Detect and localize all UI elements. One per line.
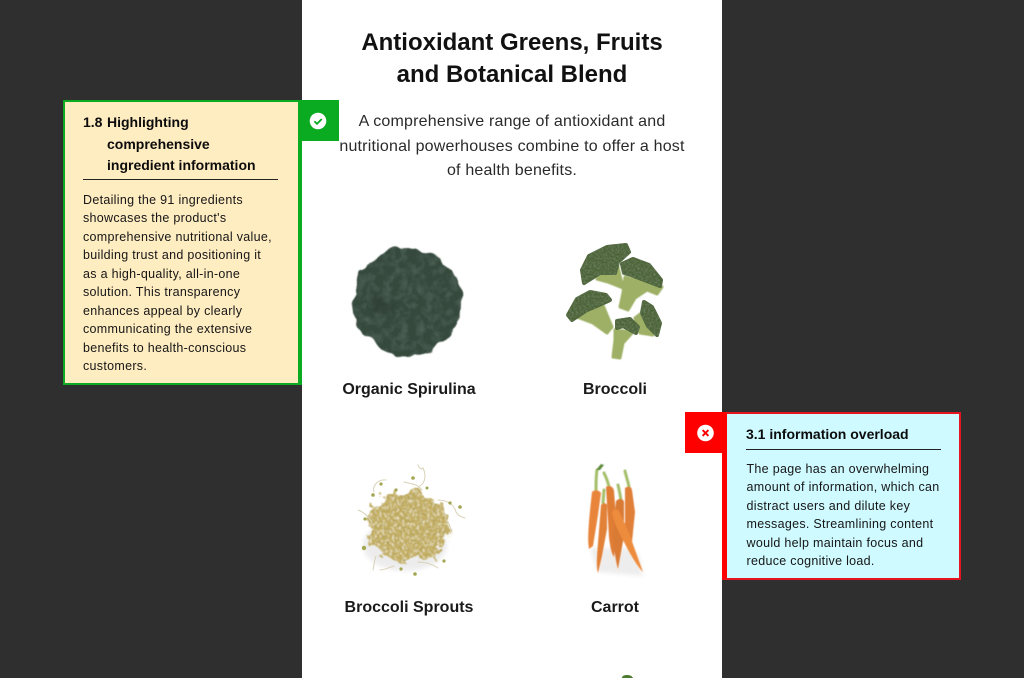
panel: 3.1 information overload: [722, 412, 961, 580]
body text: comprehensive nutritional value,: [83, 230, 272, 244]
body text: benefits to health-conscious: [83, 341, 246, 355]
white product page column: [302, 0, 722, 678]
body text: showcases the product's: [83, 211, 226, 225]
title: Antioxidant Greens, Fruits: [361, 29, 663, 56]
body text: messages. Streamlining content: [746, 517, 933, 531]
title: [361, 29, 663, 88]
intro text: A comprehensive range of antioxidant and: [359, 113, 665, 130]
body text: solution. This transparency: [83, 285, 240, 299]
body text: The page has an overwhelming: [746, 462, 929, 476]
intro text: of health benefits.: [447, 162, 577, 179]
heading: 1.8: 1.8: [83, 114, 102, 130]
body text: Detailing the 91 ingredients: [83, 193, 243, 207]
body text: reduce cognitive load.: [746, 554, 875, 568]
icon: green check tab: [302, 100, 339, 141]
label: Organic Spirulina: Organic Spirulina: [342, 381, 476, 398]
heading: 3.1: 3.1 information overload: [746, 426, 909, 442]
ingredient images: [351, 243, 664, 678]
label: Carrot: Carrot: [591, 599, 639, 616]
body text: would help maintain focus and: [746, 536, 923, 550]
body text: [83, 193, 272, 373]
floret stems: [577, 263, 662, 358]
body text: enhances appeal by clearly: [83, 304, 242, 318]
body text: amount of information, which can: [746, 480, 940, 494]
body text: communicating the extensive: [83, 322, 252, 336]
body text: distract users and dilute key: [746, 499, 910, 513]
heading: 1.8: [83, 114, 256, 173]
heading: 1.8: comprehensive: [107, 136, 210, 152]
intro text: [339, 113, 685, 179]
body text: [746, 462, 940, 568]
carrot bodies: [588, 486, 643, 573]
label: Broccoli: Broccoli: [583, 381, 647, 398]
icon: spirulina powder: [353, 248, 461, 356]
intro text: nutritional powerhouses combine to offer a host: [339, 138, 685, 154]
heading: 1.8: ingredient information: [107, 157, 256, 173]
body text: building trust and positioning it: [83, 248, 261, 262]
body text: as a high-quality, all-in-one: [83, 267, 240, 281]
icon: red cross tab: [685, 412, 726, 453]
icon: broccoli sprouts: [358, 465, 465, 576]
panel: 1.8 highlighting ingredient information: [63, 100, 302, 385]
label: Broccoli Sprouts: Broccoli Sprouts: [345, 599, 473, 616]
body text: customers.: [83, 359, 147, 373]
carrot greens: [596, 470, 629, 510]
icon: carrots: [588, 464, 643, 576]
icon: next ingredient sprig (cropped): [622, 675, 633, 678]
floret heads: [568, 245, 661, 335]
heading: 1.8: Highlighting: [107, 114, 189, 130]
title: and Botanical Blend: [397, 60, 627, 88]
icon: broccoli florets: [568, 245, 662, 358]
